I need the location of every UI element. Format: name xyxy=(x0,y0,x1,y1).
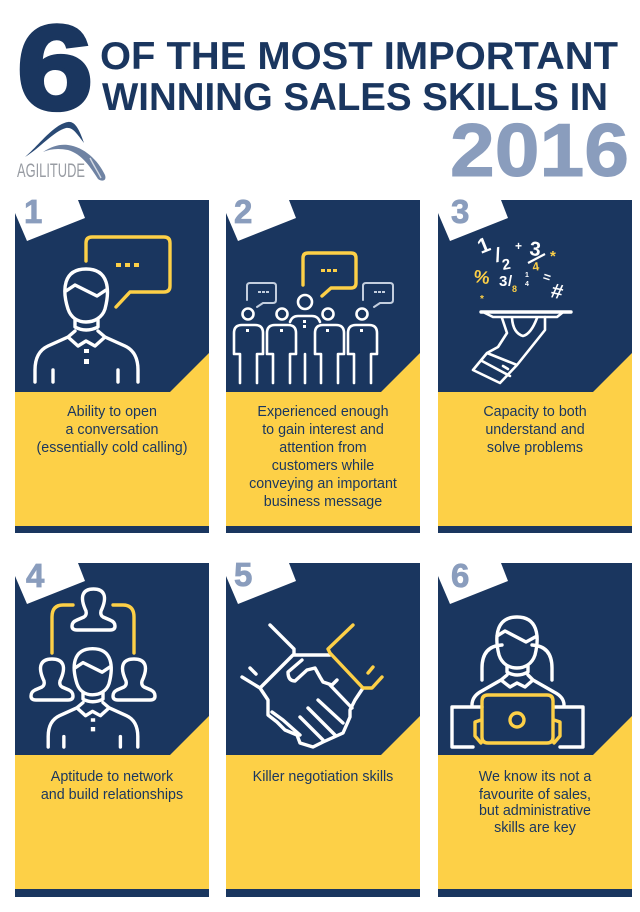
number tag 3 xyxy=(438,193,508,241)
text: skill 6: but administrative xyxy=(479,803,591,819)
icon: person with speech bubble xyxy=(35,237,170,382)
icon: hand holding tray with numbers: + xyxy=(515,239,522,253)
icon: hand holding tray with numbers: 4 xyxy=(531,259,540,274)
text: skill 3: Capacity to both xyxy=(483,404,587,420)
text: skill 4: Aptitude to network xyxy=(51,769,174,785)
icon: hand holding tray with numbers: 1 xyxy=(474,233,494,259)
panel: skill 2 xyxy=(226,193,420,533)
icon: hand holding tray with numbers: 1 xyxy=(525,272,529,279)
number tag 6 xyxy=(438,557,508,604)
text: skill 3: understand and xyxy=(485,422,585,438)
icon: hand holding tray with numbers: 3 xyxy=(528,238,542,261)
number tag 4 xyxy=(15,557,85,604)
title xyxy=(17,1,629,192)
text: skill 6 xyxy=(479,769,591,836)
panel: skill 6 xyxy=(438,557,632,897)
number tag 4: 4 xyxy=(26,557,45,594)
icon: hand holding tray with numbers: 2 xyxy=(501,256,512,274)
icon: hand holding tray with numbers xyxy=(472,233,571,383)
number tag 1 xyxy=(15,193,85,241)
text: skill 2: customers while xyxy=(272,458,374,474)
icon: hand holding tray with numbers: / xyxy=(508,273,513,290)
year 2016: 2016 xyxy=(450,108,629,192)
number tag 2: 2 xyxy=(234,193,252,230)
logo: Agilitude xyxy=(17,122,105,182)
text: skill 6: We know its not a xyxy=(479,769,591,785)
icon: hand holding tray with numbers: # xyxy=(549,279,565,304)
number tag 2 xyxy=(226,193,296,241)
text: skill 1 xyxy=(37,404,187,456)
number tag 5 xyxy=(226,556,296,604)
title line 2: WINNING SALES SKILLS IN xyxy=(102,76,608,119)
icon: hand holding tray with numbers: = xyxy=(541,269,553,285)
text: skill 3 xyxy=(483,404,587,456)
number tag 1: 1 xyxy=(24,193,42,230)
logo: Agilitude: AGILITUDE xyxy=(17,161,85,182)
icon: network of people xyxy=(31,589,155,747)
number tag 6: 6 xyxy=(451,557,469,594)
icon: hand holding tray with numbers: 3 xyxy=(499,273,507,290)
icon: hand holding tray with numbers: 4 xyxy=(525,281,529,288)
text: skill 2: attention from xyxy=(279,440,367,456)
number tag 3: 3 xyxy=(451,193,469,230)
text: skill 2: Experienced enough xyxy=(257,404,389,420)
panel: skill 1 xyxy=(15,193,209,533)
icon: person at laptop xyxy=(452,617,583,747)
title line 1: OF THE MOST IMPORTANT xyxy=(100,35,618,78)
icon: handshake xyxy=(242,625,382,747)
text: skill 2: conveying an important xyxy=(249,476,397,492)
big numeral 6: 6 xyxy=(17,1,93,135)
panel: skill 5 xyxy=(226,556,420,897)
text: skill 2: business message xyxy=(264,494,382,510)
text: skill 1: a conversation xyxy=(66,422,159,438)
icon: hand holding tray with numbers: * xyxy=(550,248,556,265)
text: skill 1: (essentially cold calling) xyxy=(37,440,187,456)
text: skill 3: solve problems xyxy=(487,440,583,456)
text: skill 1: Ability to open xyxy=(67,404,157,420)
text: skill 4 xyxy=(41,769,183,803)
text: skill 5: Killer negotiation skills xyxy=(253,769,393,785)
text: skill 2 xyxy=(249,404,397,510)
panel: skill 3 xyxy=(438,193,632,533)
icon: hand holding tray with numbers: % xyxy=(472,266,491,288)
icon: hand holding tray with numbers: 8 xyxy=(512,284,517,294)
text: skill 4: and build relationships xyxy=(41,787,183,803)
number tag 5: 5 xyxy=(234,556,252,593)
panel: skill 4 xyxy=(15,557,209,897)
icon: group of people with speech bubbles xyxy=(234,253,393,383)
icon: hand holding tray with numbers: / xyxy=(494,244,503,267)
icon: hand holding tray with numbers: * xyxy=(480,294,484,305)
text: skill 6: favourite of sales, xyxy=(479,787,591,803)
text: skill 6: skills are key xyxy=(494,820,577,836)
text: skill 2: to gain interest and xyxy=(262,422,384,438)
